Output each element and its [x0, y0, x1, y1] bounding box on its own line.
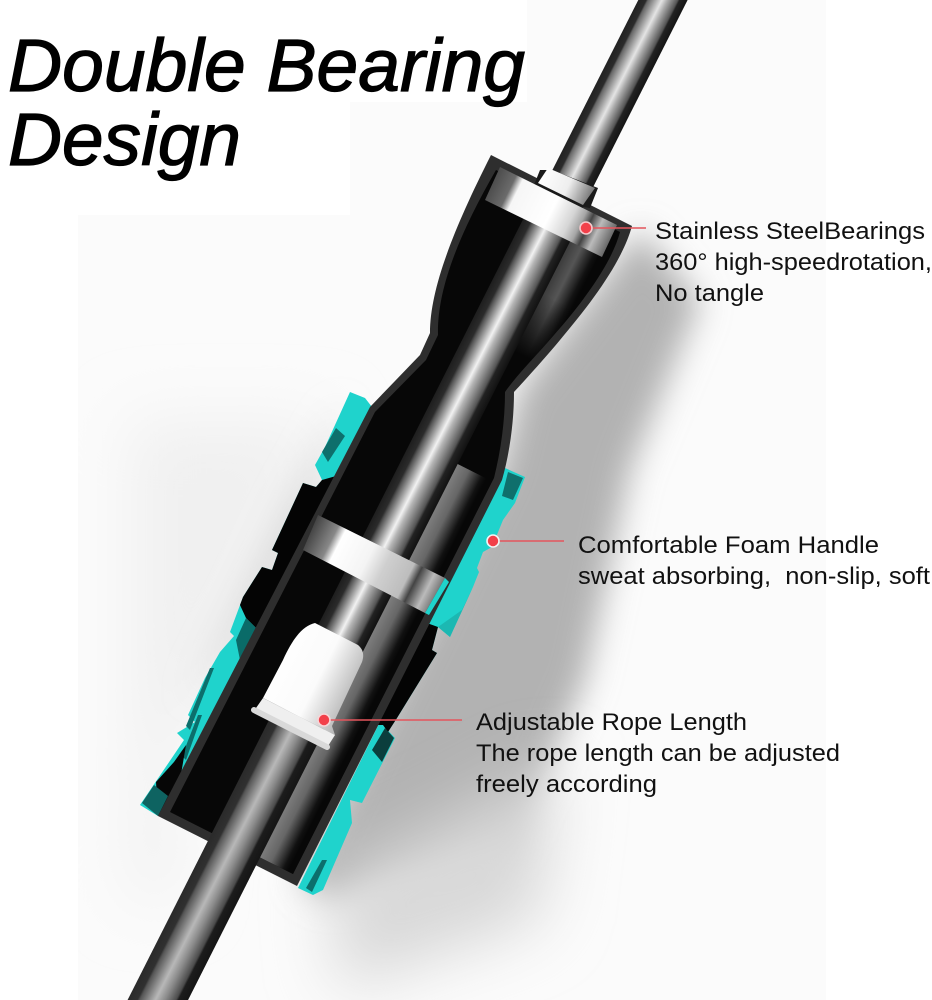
speckled inner foam tube, upper	[519, 242, 595, 352]
title: Design	[8, 98, 241, 181]
background with soft shadow	[120, 217, 718, 1000]
speckled tube fade	[514, 302, 556, 360]
upper collar	[534, 168, 598, 208]
title: Double Bearing	[8, 24, 525, 107]
stainless steel bearing, middle	[303, 515, 445, 613]
steel rod inside handle	[310, 194, 582, 664]
callout: adjustable rope length: freely according	[476, 771, 657, 798]
callout: adjustable rope length: Adjustable Rope Length	[476, 709, 747, 736]
foam handle grip, left side	[140, 392, 372, 816]
title	[0, 0, 527, 215]
adjustable rope white cap	[254, 623, 363, 747]
foam handle grip, right side	[298, 468, 525, 895]
speckled inner foam tube, lower	[260, 464, 482, 869]
stainless steel bearing, top	[485, 167, 617, 257]
callout: comfortable foam handle: Comfortable Foam Handle	[578, 532, 879, 559]
callout: stainless steel bearings: Stainless SteelBearings	[655, 218, 925, 245]
handle shell	[158, 155, 632, 886]
callout: adjustable rope length	[318, 709, 840, 798]
jump rope handle cutaway	[118, 0, 693, 1000]
callout: stainless steel bearings	[580, 218, 932, 307]
callout: stainless steel bearings: 360° high-speedrotation,	[655, 249, 932, 276]
callout: adjustable rope length: The rope length can be adjusted	[476, 740, 840, 767]
bearing teal edge	[425, 578, 449, 615]
steel rod lower	[118, 636, 360, 1000]
handle interior	[170, 170, 620, 874]
callout: comfortable foam handle	[487, 532, 930, 590]
callout: stainless steel bearings: No tangle	[655, 280, 764, 307]
callout: comfortable foam handle: sweat absorbing, non-slip, soft	[578, 563, 930, 590]
steel rod outside handle	[533, 0, 689, 229]
